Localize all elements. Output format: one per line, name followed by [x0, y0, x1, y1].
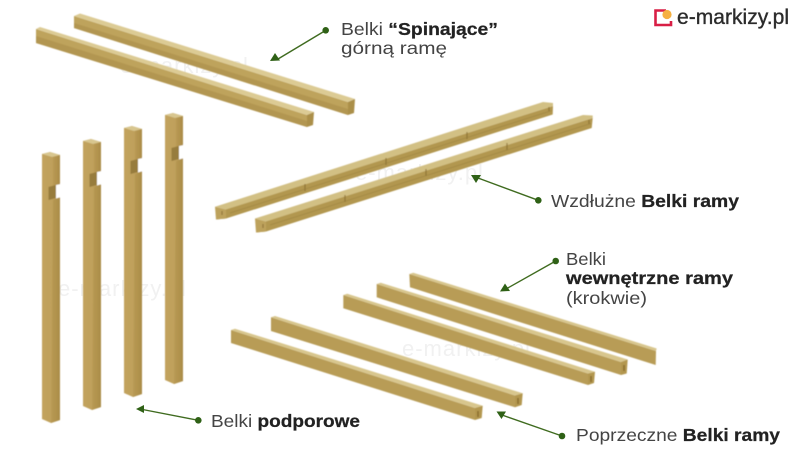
label: rafters	[565, 249, 733, 308]
watermark: e-markizy.pl: e-markizy.pl	[120, 53, 249, 78]
beam: tie beam rear	[74, 14, 355, 115]
arrow: support posts	[136, 405, 202, 424]
label: rafters: (krokwie)	[566, 288, 647, 308]
label: tie beams: Belki “Spinające”	[341, 19, 498, 39]
watermark: e-markizy.pl: e-markizy.pl	[58, 276, 187, 301]
beam: longitudinal rear	[215, 102, 553, 220]
transverse beam rear	[271, 316, 523, 407]
label: support posts: Belki podporowe	[211, 411, 360, 431]
label: rafters: Belki	[566, 249, 606, 269]
label: tie beams	[341, 19, 498, 58]
watermark: e-markizy.pl	[58, 53, 531, 361]
post 1	[42, 152, 61, 423]
logo wordmark: e-markizy.pl	[677, 6, 789, 29]
watermark: e-markizy.pl: e-markizy.pl	[355, 160, 484, 185]
beams: longitudinal frame beams	[215, 102, 593, 232]
beams: transverse frame beams	[231, 316, 523, 420]
label: rafters: wewnętrzne ramy	[565, 268, 733, 288]
post 3	[124, 126, 143, 397]
rafter 3	[343, 294, 595, 385]
transverse beam front	[231, 329, 483, 420]
beam: tie beam front	[36, 27, 314, 127]
rafter 1	[409, 273, 657, 365]
label: tie beams: górną ramę	[341, 38, 447, 58]
label: longitudinal beams: Wzdłużne Belki ramy	[551, 191, 739, 211]
rafter 2	[377, 283, 628, 375]
label: transverse beams: Poprzeczne Belki ramy	[576, 425, 780, 445]
watermark: e-markizy.pl: e-markizy.pl	[402, 336, 531, 361]
beam: longitudinal front	[255, 115, 593, 232]
post 2	[83, 139, 102, 410]
logo: e-markizy.pl	[656, 6, 789, 29]
beams: inner rafters	[343, 273, 657, 385]
icon: logo mark	[656, 10, 672, 25]
arrow: transverse beams	[496, 412, 565, 439]
arrow: tie beams	[270, 27, 329, 61]
arrow: longitudinal beams	[471, 175, 542, 204]
beams: support posts	[42, 113, 184, 423]
arrow: rafters	[500, 258, 559, 292]
beams: top tie beams	[36, 14, 355, 127]
post 4	[165, 113, 184, 384]
